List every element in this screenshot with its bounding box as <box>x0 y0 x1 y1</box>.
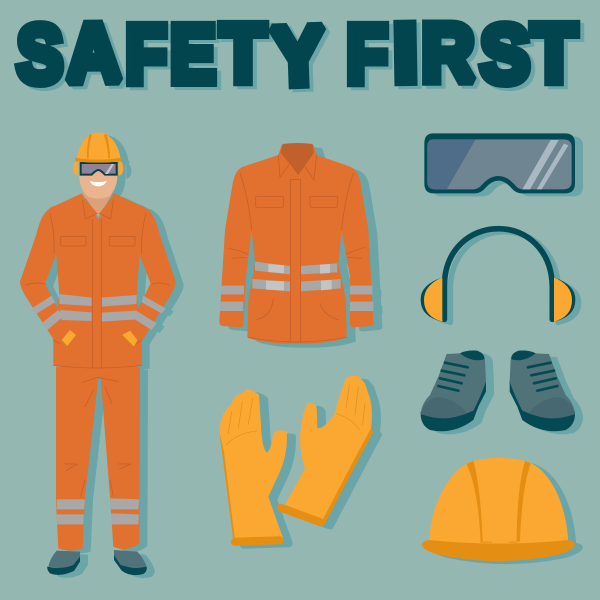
safety boots <box>421 351 575 431</box>
goggle lens <box>427 139 572 189</box>
neck <box>84 188 112 217</box>
ear defenders <box>421 229 575 322</box>
face <box>79 160 117 199</box>
shirt collar <box>82 194 115 219</box>
title: SAFETY FIRST: I <box>393 7 418 99</box>
trousers <box>47 367 147 575</box>
title: SAFETY FIRST: R <box>422 8 474 99</box>
title: SAFETY FIRST: F <box>346 8 388 99</box>
right glove <box>276 376 373 528</box>
title: SAFETY FIRST: T <box>531 6 577 99</box>
rubber gloves <box>219 376 373 546</box>
title: SAFETY FIRST: S <box>17 8 63 100</box>
safety goggles <box>424 133 575 193</box>
collar opening <box>281 143 314 175</box>
title: SAFETY FIRST: F <box>125 8 167 99</box>
smile <box>90 181 107 186</box>
left glove <box>219 389 287 546</box>
hat brim <box>422 540 575 561</box>
goggles <box>81 163 117 175</box>
worker figure <box>20 132 176 575</box>
title: SAFETY FIRST <box>17 6 577 103</box>
title: SAFETY FIRST: A <box>66 6 121 99</box>
helmet <box>75 132 122 163</box>
title: SAFETY FIRST: S <box>480 7 530 100</box>
title: SAFETY FIRST: Y <box>270 10 326 103</box>
right boot <box>510 351 575 431</box>
gloved hands in pockets <box>62 330 137 347</box>
boots <box>47 550 147 575</box>
hard hat <box>422 458 575 561</box>
jacket on worker <box>20 132 176 369</box>
work jacket <box>219 143 373 344</box>
collar <box>278 155 317 180</box>
title: SAFETY FIRST: E <box>170 8 216 99</box>
left boot <box>421 351 486 431</box>
title: SAFETY FIRST: T <box>220 6 266 99</box>
ear muffs <box>73 161 123 176</box>
